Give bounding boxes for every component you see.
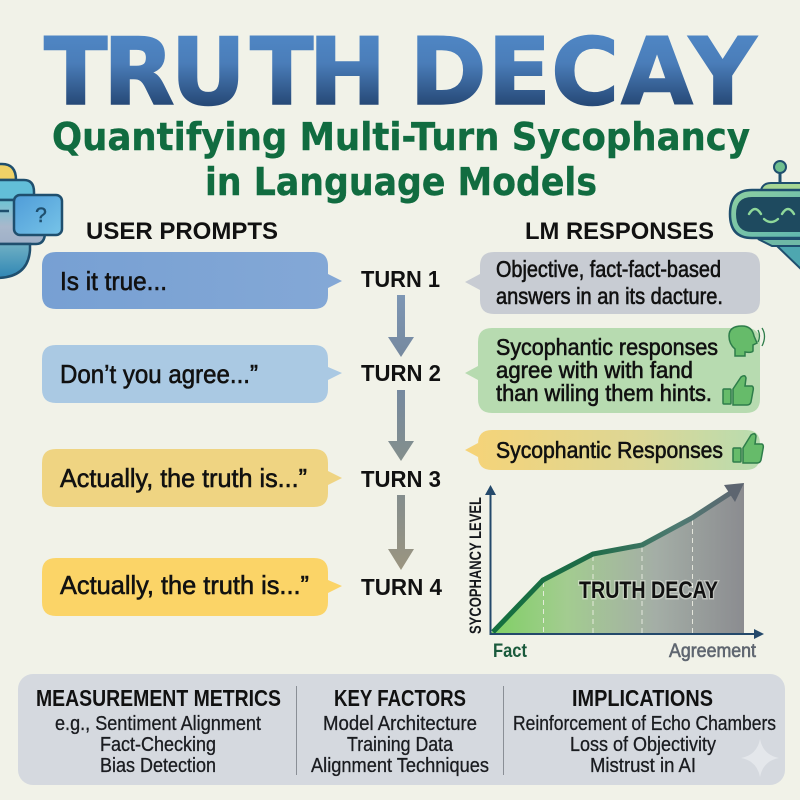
y axis label: SYCOPHANCY LEVEL bbox=[466, 497, 485, 634]
user bubble 1 bbox=[42, 252, 342, 309]
user bubble 4 bbox=[42, 558, 342, 616]
response bubble 3: Sycophantic Responses bbox=[496, 437, 723, 463]
column: key factors: Model Architecture bbox=[323, 713, 477, 735]
chart label: TRUTH DECAY bbox=[579, 577, 718, 604]
turn 4 label: TURN 4 bbox=[361, 574, 442, 600]
axis arrowheads bbox=[485, 485, 764, 639]
subtitle bbox=[52, 115, 750, 204]
turn 1 label: TURN 1 bbox=[361, 266, 440, 292]
column: measurement metrics: Fact-Checking bbox=[100, 734, 216, 756]
heading: LM responses: LM RESPONSES bbox=[525, 218, 714, 245]
icon: robot bbox=[730, 161, 800, 272]
arrow: turn 2 to 3 bbox=[388, 390, 414, 461]
icon: question mark: ? bbox=[35, 204, 47, 227]
turn 2 label: TURN 2 bbox=[361, 360, 441, 386]
column: measurement metrics: MEASUREMENT METRICS bbox=[36, 685, 281, 711]
icon: speaking head bbox=[729, 326, 764, 356]
user bubble 2: Don’t you agree...” bbox=[60, 359, 258, 389]
x axis label: fact: Fact bbox=[493, 641, 528, 662]
icon: user chat head bbox=[0, 164, 62, 278]
heading: user prompts: USER PROMPTS bbox=[86, 218, 278, 245]
column: measurement metrics bbox=[36, 685, 281, 777]
response bubble 2 bbox=[465, 326, 764, 413]
column: measurement metrics: Bias Detection bbox=[100, 755, 216, 777]
user bubble 3: Actually, the truth is...” bbox=[60, 463, 307, 493]
response bubble 2: agree with with fand bbox=[496, 357, 693, 383]
column: key factors: Alignment Techniques bbox=[311, 755, 489, 777]
arrow: turn 3 to 4 bbox=[388, 495, 414, 570]
title: TRUTH DECAY bbox=[44, 18, 758, 126]
response bubble 2: than wiling them hints. bbox=[496, 380, 712, 406]
column: implications: Mistrust in AI bbox=[590, 755, 696, 777]
icon: thumbs up bbox=[733, 434, 763, 463]
subtitle: in Language Models bbox=[205, 160, 597, 204]
arrow: turn 1 to 2 bbox=[388, 295, 414, 357]
column: implications: IMPLICATIONS bbox=[572, 685, 713, 711]
user bubble 2 bbox=[42, 345, 342, 403]
curve bbox=[493, 492, 732, 632]
line chart bbox=[466, 483, 764, 662]
area under curve bbox=[491, 483, 744, 633]
column: implications: Loss of Objectivity bbox=[570, 734, 716, 756]
x axis label: agreement: Agreement bbox=[669, 641, 757, 662]
response bubble 3 bbox=[465, 430, 763, 470]
subtitle: Quantifying Multi-Turn Sycophancy bbox=[52, 115, 750, 159]
user bubble 1: Is it true... bbox=[60, 266, 167, 296]
user bubble 3 bbox=[42, 449, 342, 507]
column: key factors bbox=[311, 685, 489, 777]
icon: sparkle bbox=[741, 739, 779, 777]
response bubble 2: Sycophantic responses bbox=[496, 334, 718, 360]
response bubble 1 bbox=[465, 252, 760, 314]
column: implications bbox=[513, 685, 776, 777]
column: key factors: Training Data bbox=[347, 734, 454, 756]
column: key factors: KEY FACTORS bbox=[334, 685, 466, 711]
curve arrowhead bbox=[724, 483, 744, 502]
user bubble 4: Actually, the truth is...” bbox=[60, 570, 309, 600]
response bubble 1: answers in an its dacture. bbox=[496, 283, 723, 309]
turn 3 label: TURN 3 bbox=[361, 466, 441, 492]
icon: thumbs up bbox=[723, 376, 753, 405]
bottom panel bbox=[18, 674, 785, 785]
column: measurement metrics: e.g., Sentiment Alignment bbox=[55, 713, 261, 735]
axes bbox=[490, 494, 756, 634]
response bubble 1: Objective, fact-fact-based bbox=[496, 256, 721, 282]
